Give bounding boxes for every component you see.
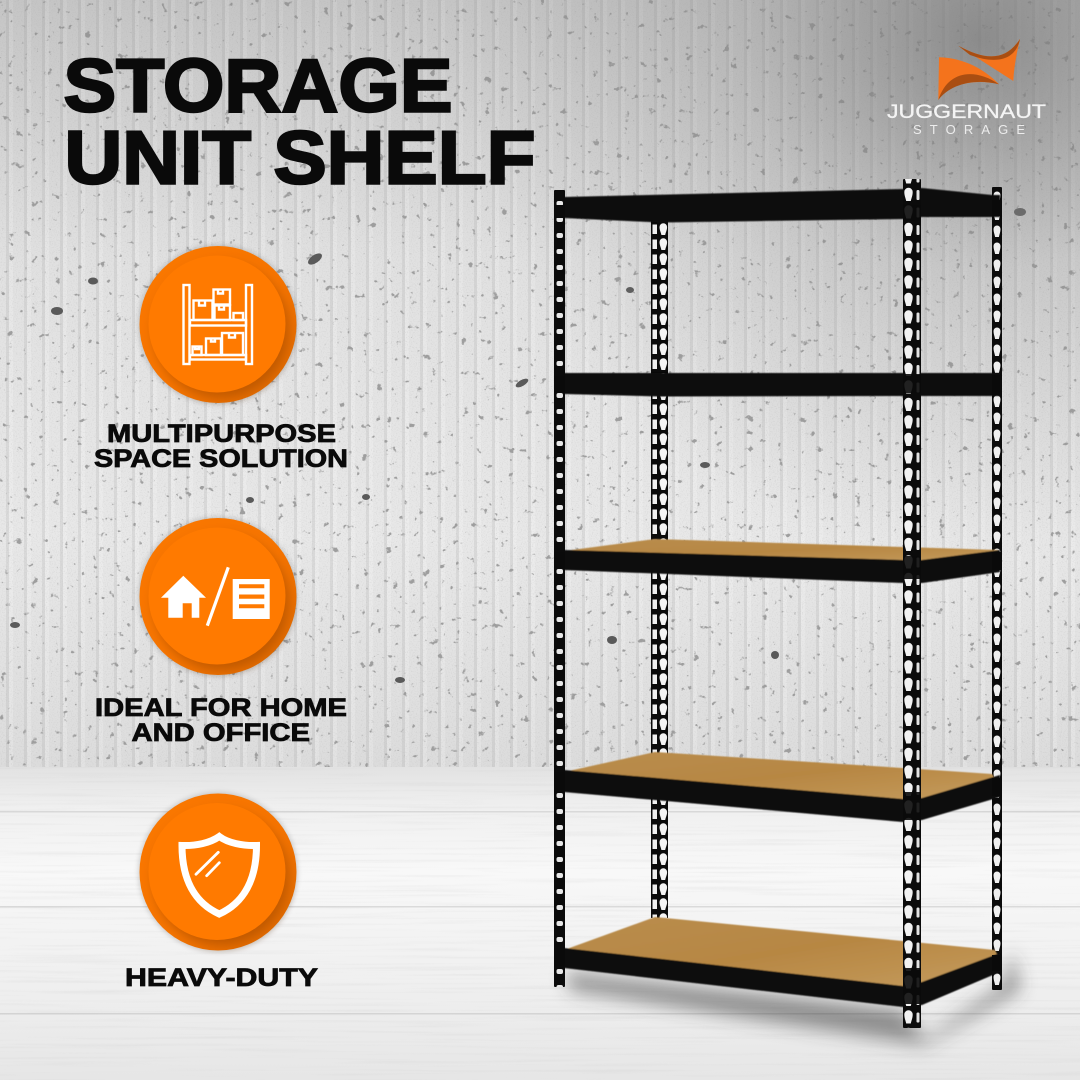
shelf 2	[564, 373, 1000, 396]
logo: Juggernaut Storage	[887, 39, 1046, 137]
label: ideal for home and office	[95, 694, 347, 747]
front posts	[554, 179, 1002, 1028]
shelf 1: top tier	[564, 188, 1000, 222]
shelf floor shadow	[566, 950, 1020, 1045]
feature 2: home and office	[95, 518, 347, 747]
feature 1: multipurpose	[94, 246, 348, 473]
label: ideal for home and office: AND OFFICE	[132, 719, 310, 747]
feature 3: heavy-duty	[125, 793, 318, 992]
icon: orange badge with shelf and boxes	[139, 246, 297, 404]
shelf 5: bottom tier	[564, 917, 1000, 1007]
background: concrete wall	[0, 0, 1080, 768]
icon: orange badge with house and document	[139, 518, 297, 676]
title	[64, 44, 536, 200]
label: multipurpose space solution: SPACE SOLUTION	[94, 445, 348, 473]
label: multipurpose space solution: MULTIPURPOSE	[107, 420, 336, 448]
label: ideal for home and office: IDEAL FOR HOME	[95, 694, 347, 722]
title: UNIT SHELF	[64, 116, 536, 200]
shelf 3	[564, 539, 1000, 583]
label: heavy-duty: HEAVY-DUTY	[125, 964, 318, 992]
icon: logo swoosh	[938, 39, 1020, 100]
icon: orange badge with shield	[139, 793, 297, 951]
logo: Juggernaut Storage: JUGGERNAUT	[887, 101, 1046, 123]
rear posts	[651, 187, 1002, 990]
background: white wood floor	[0, 767, 1080, 1080]
shelf 4	[564, 752, 1000, 822]
logo: Juggernaut Storage: STORAGE	[913, 122, 1025, 137]
title: STORAGE	[64, 44, 452, 128]
label: multipurpose space solution	[94, 420, 348, 473]
product: five-tier metal storage shelf	[554, 179, 1020, 1045]
